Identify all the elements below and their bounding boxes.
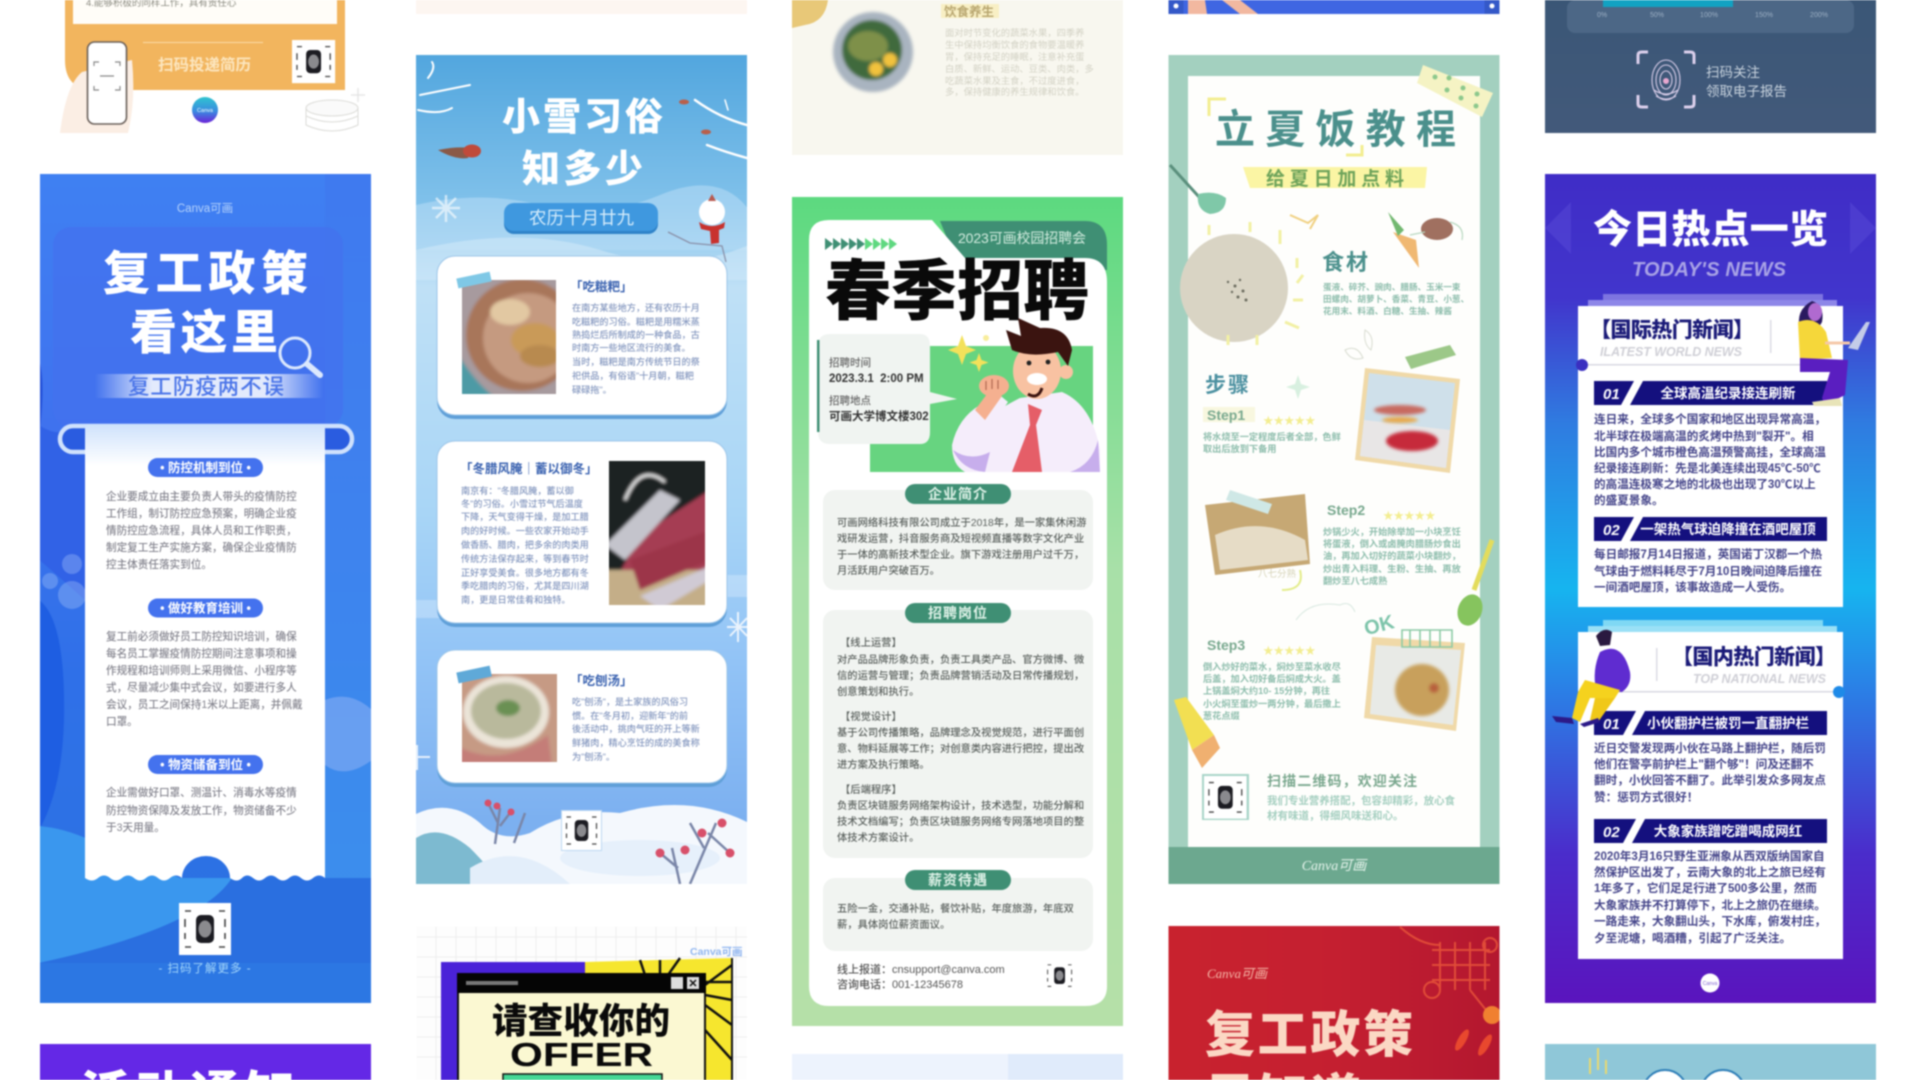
section: 薪资待遇	[823, 870, 1093, 951]
section: 招聘岗位	[823, 603, 1093, 858]
card: 吃糍粑: 祀供品，有俗语"十月朝，糍粑	[572, 370, 694, 381]
section: 防控机制到位	[106, 458, 297, 571]
title: 今日热点一览: 今日热点一览	[1593, 208, 1828, 252]
card: 吃刨汤: 「吃刨汤」	[570, 673, 633, 688]
section: 做好教育培训	[106, 598, 303, 728]
panel: cream food card (cropped top): 白质、新鲜、运动、豆类、肉类，多	[945, 63, 1094, 74]
title: 春季招聘: 春季招聘	[825, 254, 1089, 328]
news bar 02	[1594, 819, 1827, 843]
step 2: 将蛋液，倒入或卤腌肉腊肠炒食出	[1323, 538, 1461, 549]
step 2: 油，再加入切好的蔬菜小块翻炒，	[1323, 550, 1461, 561]
step 1: 取出后放到下备用	[1203, 443, 1276, 454]
window: OFFER	[510, 1036, 653, 1073]
contact info: 咨询电话：001-12345678	[837, 977, 963, 991]
panel: blue return-to-work policy poster	[39, 174, 372, 1003]
card: 冬腊风腌: 季吃腊肉的习俗，尤其是四川湖	[461, 580, 589, 591]
panel: 春季招聘 poster	[792, 197, 1123, 1026]
text: scan prompt: 扫码关注	[1706, 65, 1760, 80]
step 3: ★★★★★	[1263, 645, 1316, 657]
news bar 01	[1594, 711, 1827, 735]
date pill: 农历十月廿九	[529, 208, 634, 228]
subtitle band: 复工防疫两不误	[128, 375, 284, 399]
icon: sparkles	[948, 335, 989, 372]
section: 招聘岗位: 招聘岗位	[928, 605, 988, 621]
icon: fingerprint scan	[1638, 52, 1694, 107]
card: 吃糍粑: 当时，糍粑是南方传统节日的祭	[572, 356, 700, 367]
illustration: man	[952, 318, 1100, 472]
card: 吃刨汤: 惯。在"冬月初，迎新年"的前	[572, 710, 688, 721]
panel: national news: 夕至泥塘，喝酒糟，引起了广泛关注。	[1594, 931, 1791, 945]
chart: progress bar fragment: 0%	[1597, 12, 1607, 19]
section: 招聘岗位: 创意策划和执行。	[837, 685, 919, 698]
text: scan caption: - 扫码了解更多 -	[158, 961, 252, 975]
section: 物资储备到位: 防控物资保障及发放工作，物资储备不少	[106, 804, 297, 817]
panel: national news	[1578, 620, 1845, 959]
icon: magnifier	[280, 338, 320, 375]
panel: national news: 然保护区出发了，云南大象的北上之旅已经有	[1594, 865, 1826, 879]
step 3: Step3	[1207, 637, 1245, 653]
icon: snowman	[668, 194, 726, 262]
panel: world news: 【国际热门新闻】	[1590, 318, 1754, 342]
section: 招聘岗位: 对产品品牌形象负责，负责工具类产品、官方微博、微	[837, 653, 1085, 666]
photo: salad plate	[1345, 330, 1460, 473]
paper scroll	[85, 425, 325, 880]
news bar 01: 01	[1603, 386, 1620, 403]
contact info	[837, 962, 1005, 991]
section: 物资储备到位: • 物资储备到位 •	[160, 757, 251, 772]
panel: national news: 【国内热门新闻】	[1672, 645, 1836, 669]
follow text: 扫描二维码，欢迎关注	[1267, 773, 1417, 789]
panel: OFFER poster (cropped)	[416, 926, 749, 1080]
text: Canva logo: Canva可画	[1207, 966, 1269, 981]
section: 防控机制到位: 制定复工生产实施方案，确保企业疫情防	[106, 541, 297, 554]
step 3: 倒入炒好的菜水，焖炒至菜水收尽	[1203, 661, 1342, 672]
info bubble	[817, 334, 957, 444]
panel: 今日热点一览 poster	[1545, 174, 1876, 1003]
card: 冬腊风腌: 做香肠、腊肉，把多余的肉类用	[461, 539, 589, 550]
panel: top-left orange recruiting card: Canva	[197, 108, 214, 114]
news bar 02: 大象家族蹭吃蹭喝成网红	[1654, 823, 1802, 839]
card: 吃糍粑: 在南方某些地方，还有农历十月	[572, 302, 700, 313]
panel: world news: 的高温连极寒之地的北极也出现了30℃以上	[1594, 477, 1816, 491]
news bar 02: 一架热气球迫降撞在酒吧屋顶	[1640, 521, 1816, 537]
step 2: 炒锅少火，开始除举加一小块烹饪	[1323, 526, 1461, 537]
title: 立夏饭教程: 立夏饭教程	[1215, 108, 1456, 152]
title: 复工政策: 复工政策	[1205, 1007, 1413, 1063]
section: 防控机制到位: 企业要成立由主要负责人带头的疫情防控	[106, 490, 297, 503]
ingredients text: 田螺肉、胡萝卜、香菜、青豆、小葱、	[1323, 293, 1469, 304]
section: 防控机制到位: 情防控应急流程，具体人员和工作职责，	[106, 524, 297, 537]
panel: cream food card (cropped top): 吃蔬菜水果及主食，不过度进食，	[945, 75, 1084, 86]
panel: cream food card (cropped top)	[792, 0, 1123, 155]
photo: rice bowl	[1180, 215, 1318, 345]
QR code	[561, 810, 602, 851]
panel: national news: 1年多了，它们足足行进了500多公里，然而	[1594, 881, 1817, 895]
card: 冬腊风腌	[437, 441, 727, 627]
panel: world news: ILATEST WORLD NEWS	[1600, 345, 1743, 359]
section: 薪资待遇: 五险一金，交通补贴，餐饮补贴，年度旅游，年底双	[837, 902, 1074, 915]
card: 冬腊风腌: 传统方法保存起来，等到春节时	[461, 553, 589, 564]
news bar 01: 01	[1603, 716, 1620, 733]
section: 做好教育培训: • 做好教育培训 •	[160, 600, 251, 616]
QR code	[1046, 963, 1074, 988]
section: 做好教育培训: 口罩。	[106, 716, 138, 728]
section: 企业简介: 可画网络科技有限公司成立于2018年，是一家集休闲游	[837, 516, 1086, 529]
info bubble: 招聘地点	[829, 394, 871, 407]
section: 做好教育培训: 每名员工掌握疫情防控期间注意事项和操	[106, 647, 297, 660]
footer: Canva可画	[1302, 859, 1368, 874]
panel: purple poster bottom-left (cropped)	[40, 1044, 371, 1080]
panel: national news: 近日交警发现两小伙在马路上翻护栏，随后罚	[1594, 741, 1826, 755]
panel: top-left orange recruiting card	[60, 0, 365, 133]
card: 吃糍粑: 吃糍粑的习俗。糍粑是用糯米蒸	[572, 316, 700, 327]
section: 防控机制到位: 控主体责任落实到位。	[106, 558, 212, 571]
step 2	[1323, 502, 1462, 586]
icon: Chinese knot	[1400, 927, 1497, 1015]
panel: cream food card (cropped top): 生中保持均衡饮食的食物要温暖养	[945, 39, 1084, 50]
title: 小雪习俗知多少	[502, 97, 663, 191]
step 2: 翻炒至八七成熟	[1323, 575, 1387, 586]
section: 招聘岗位: 体技术方案设计。	[837, 831, 919, 844]
panel: cream food card (cropped top): 胃，保持充足的睡眠，注意补充蛋	[945, 51, 1084, 62]
news bar 01	[1594, 381, 1827, 405]
panel: 小雪习俗 poster	[416, 55, 750, 884]
panel: 立夏饭教程 poster	[1168, 55, 1500, 884]
contact info: 线上报道：cnsupport@canva.com	[837, 962, 1005, 976]
section: 招聘岗位: 【视觉设计】	[840, 710, 902, 723]
subtitle band	[95, 374, 323, 399]
ingredients text: 花用末、料酒、白糖、生抽、辣酱	[1323, 305, 1452, 316]
panel: cream food card (cropped top): 面对时节变化的蔬菜水果，四季养	[945, 27, 1084, 38]
panel: national news: 一路走来，大象翻山头，下水库，俯发村庄，	[1594, 914, 1826, 928]
section: 招聘岗位: 意、物料延展等工作；对创意类内容进行把控，提出改	[837, 742, 1085, 755]
card: 冬腊风腌: 正好享受美食。很多地方都有冬	[461, 567, 589, 578]
step 3	[1203, 637, 1342, 721]
snow ground	[416, 612, 749, 884]
panel: national news: 大象家族并不打算停下，北上之旅仍在继续。	[1594, 898, 1826, 912]
title: 小雪习俗知多少: 小雪习俗	[502, 97, 663, 139]
step 1: 将水烧至一定程度后者全部，色鲜	[1203, 431, 1341, 442]
card: 冬腊风腌: 肉的好时候。一些农家开始动手	[461, 525, 589, 536]
date pill	[504, 203, 658, 234]
title: 复工政策看这里: 看这里	[130, 306, 278, 359]
section: 招聘岗位: 【后端程序】	[840, 783, 902, 796]
panel: world news: 连日来，全球多个国家和地区出现异常高温，	[1594, 412, 1826, 426]
panel: world news	[1576, 294, 1843, 607]
icon: sauce bottle	[1174, 697, 1220, 768]
section: 企业简介	[823, 484, 1093, 590]
step 1: ★★★★★	[1263, 415, 1316, 427]
title: 复工政策看这里	[103, 247, 308, 359]
chart: progress bar fragment	[1567, 0, 1854, 33]
section: 企业简介: 企业简介	[928, 486, 988, 502]
section: 做好教育培训: 作规程和培训师则上采用微信、小程序等	[106, 664, 297, 677]
card: 冬腊风腌: 下降，天气变得干燥，是加工腊	[461, 511, 589, 522]
panel: world news: 每日邮报7月14日报道，英国诺丁汉郡一个热	[1594, 547, 1822, 561]
chart: progress bar fragment: 100%	[1700, 12, 1718, 19]
card: 吃糍粑: 「吃糍粑」	[570, 279, 633, 294]
section: 招聘岗位: 负责区块链服务网络架构设计，技术选型，功能分解和	[837, 799, 1084, 812]
card: 冬腊风腌: 南京有："冬腊风腌，蓄以御	[461, 485, 574, 496]
card: 吃刨汤: 鲜猪肉，精心烹饪的成的美食称	[572, 737, 700, 748]
panel: world news: 的盛夏景象。	[1594, 493, 1664, 507]
tab: 校园招聘会	[940, 221, 1107, 270]
illustration: sitting man	[1552, 630, 1630, 727]
icon: bird	[438, 144, 481, 158]
card: 吃刨汤: 後活动中，挑肉气旺的开上等新	[572, 723, 700, 734]
tab: 校园招聘会: 2023可画校园招聘会	[958, 230, 1086, 246]
panel: world news: 纪录接连刷新：先是北美连续出现45℃-50℃	[1594, 461, 1821, 475]
text: scan prompt	[1706, 65, 1787, 99]
icon: arrows	[825, 238, 897, 250]
green hero block	[870, 346, 1093, 472]
step 3: 后盖，加入切好备后焖成大火。盖	[1203, 673, 1341, 684]
subtitle band	[1243, 167, 1427, 190]
panel: world news: 气球由于燃料耗尽于7月10日晚间迫降后撞在	[1594, 564, 1822, 578]
panel: national news: 翻时，小伙回答不翻了。此举引发众多网友点	[1594, 773, 1826, 787]
panel: national news: 他们在警亭前护栏上"翻个够"！问及还翻不	[1594, 757, 1814, 771]
window: 请查收你的	[492, 1001, 670, 1041]
step 3: 上锅盖焖大约10- 15分钟，再往	[1203, 685, 1330, 696]
logo: footer dot: Canva	[1703, 981, 1717, 987]
card: 吃刨汤: 为"刨汤"。	[572, 751, 615, 762]
ingredients text	[1323, 281, 1469, 316]
heading: 食材: 食材	[1322, 250, 1368, 275]
photo: fried rice: OK	[1362, 611, 1397, 640]
section: 薪资待遇: 薪资待遇	[928, 872, 988, 888]
step 3: 小火焖至蛋炒一两分钟，最后撒上	[1203, 698, 1341, 709]
text: Canva logo: Canva可画	[690, 946, 743, 958]
panel: teal card bottom of column five	[1545, 1044, 1876, 1080]
section: 物资储备到位	[106, 755, 297, 834]
section: 招聘岗位: 技术文档编写；负责区块链服务网络专网落地项目的整	[837, 815, 1084, 828]
info bubble: 2023.3.1 2:00 PM	[829, 373, 924, 385]
section: 企业简介: 月活跃用户突破百万。	[837, 564, 940, 577]
title: 小雪习俗知多少: 知多少	[522, 149, 643, 191]
section: 防控机制到位: • 防控机制到位 •	[160, 460, 251, 475]
follow text	[1267, 773, 1456, 822]
card: 吃糍粑: 熟捣烂后所制成的一种食品，古	[572, 329, 700, 340]
section: 做好教育培训: 式，尽量减少集中式会议，如要进行多人	[106, 681, 297, 694]
step 1: Step1	[1207, 407, 1245, 423]
text: Canva logo: Canva可画	[177, 203, 233, 215]
icon: ladle	[1170, 165, 1226, 214]
panel: cream food card (cropped top): 饮食养生	[944, 4, 994, 19]
news bar 01: 全球高温纪录接连刷新	[1660, 385, 1796, 401]
info bubble: 招聘时间	[829, 356, 871, 369]
card: 冬腊风腌: 冬"的习俗。小雪过节气后温度	[461, 498, 583, 509]
panel: slate report card (cropped top)	[1545, 0, 1876, 133]
news bar 02: 02	[1603, 522, 1620, 539]
step 2: Step2	[1327, 502, 1365, 518]
panel: national news: 2020年3月16只野生亚洲象从西双版纳国家自	[1594, 849, 1825, 863]
section: 做好教育培训: 复工前必须做好员工防控知识培训，确保	[106, 630, 297, 643]
news bar 02	[1594, 517, 1827, 541]
section: 物资储备到位: 于3天用量。	[106, 822, 165, 834]
card: 吃糍粑: 碌碌拖"。	[572, 384, 612, 395]
panel: cream food card (cropped top): 多，保持健康的养生规律和饮食。	[945, 86, 1084, 97]
panel: blue card top of column four	[1168, 0, 1500, 14]
panel: pale blue card bottom of column three	[792, 1054, 1123, 1080]
heading: 步骤	[1205, 374, 1310, 399]
section: 薪资待遇: 薪，具体岗位薪资面议。	[837, 918, 950, 931]
chart: progress bar fragment: 50%	[1650, 12, 1664, 19]
photo: noodle plate	[833, 12, 913, 92]
subtitle band: 给夏日加点料	[1266, 168, 1404, 190]
step 2: ★★★★★	[1383, 510, 1436, 522]
ingredients text: 蛋液、碎芥、豌肉、腊肠、玉米一束	[1323, 281, 1461, 292]
panel: top-left orange recruiting card: 扫码投递简历	[158, 55, 251, 74]
card: 冬腊风腌: 南，更是日常佳肴和独特。	[461, 594, 570, 605]
title: 复工政策看这里: 复工政策	[103, 247, 308, 300]
news bar 02: 02	[1603, 824, 1620, 841]
section: 企业简介: 戏研发运营，抖音服务商及短视频直播等数字文化产业	[837, 532, 1084, 545]
illustration: woman with laptop	[1798, 301, 1870, 406]
heading: 步骤: 步骤	[1205, 374, 1249, 397]
photo: fried rice	[1362, 611, 1465, 731]
card: 冬腊风腌: 「冬腊风腌｜蓄以御冬」	[460, 461, 598, 476]
card: 吃刨汤	[437, 650, 727, 787]
panel: red policy poster (cropped)	[1168, 926, 1501, 1080]
panel: world news: 比国内多个城市橙色高温预警高挂，全球高温	[1594, 445, 1826, 459]
panel: pale card top of column two	[416, 0, 747, 14]
chart: progress bar fragment: 150%	[1755, 12, 1773, 19]
news bar 01: 小伙翻护栏被罚一直翻护栏	[1647, 715, 1809, 731]
section: 企业简介: 于一体的高新技术型企业。旗下游戏注册用户过千万，	[837, 548, 1084, 561]
QR code	[179, 903, 231, 955]
window	[457, 973, 706, 1080]
subtitle: TODAY'S NEWS	[1632, 259, 1787, 281]
tape: dotted	[1417, 65, 1493, 117]
card: 吃糍粑: 时南方一些地区流行的美食。	[572, 342, 691, 353]
section: 防控机制到位: 工作组，制订防控应急预案，明确企业疫	[106, 507, 297, 520]
section: 招聘岗位: 【线上运营】	[840, 636, 902, 649]
follow text: 材有味道，得细风味送和心。	[1267, 809, 1404, 822]
section: 物资储备到位: 企业需做好口罩、测温计、消毒水等疫情	[106, 786, 297, 799]
logo: footer dot	[1700, 974, 1720, 992]
step 1	[1203, 407, 1341, 454]
QR code	[1202, 774, 1249, 820]
step 3: 葱花点缀	[1203, 710, 1240, 721]
branches and birds	[418, 62, 747, 158]
footer	[1168, 847, 1500, 884]
icon: carrot and mushroom	[1388, 212, 1462, 268]
info bubble: 可画大学博文楼302	[829, 409, 929, 423]
card: 吃刨汤: 吃"刨汤"，是土家族的风俗习	[572, 696, 688, 707]
icon: snowflake	[432, 195, 460, 222]
chart: progress bar fragment: 200%	[1810, 12, 1828, 19]
step 2: 炒出青入料理、生粉、生抽、再放	[1323, 563, 1462, 574]
scroll bar	[60, 426, 352, 452]
section: 招聘岗位: 信的运营与管理；负责品牌营销活动及日常传播规划，	[837, 669, 1084, 682]
section: 做好教育培训: 会议，员工之间保持1米以上距离，并佩戴	[106, 698, 303, 711]
panel: world news: 北半球在极端高温的炙烤中热到"裂开"。相	[1594, 429, 1814, 443]
follow text: 我们专业营养搭配，包容却精彩，放心食	[1267, 794, 1456, 807]
section: 招聘岗位: 进方案及执行策略。	[837, 758, 930, 771]
photo: chopping board	[1205, 490, 1310, 590]
panel: national news: 赞：惩罚方式很好！	[1594, 790, 1698, 804]
panel: national news: TOP NATIONAL NEWS	[1693, 672, 1827, 686]
icon: whisk	[1453, 540, 1492, 629]
section: 招聘岗位: 基于公司传播策略，品牌理念及视觉规范，进行平面创	[837, 726, 1084, 739]
photo: chopping board: 八七分熟	[1258, 568, 1297, 580]
panel: world news: 一间酒吧屋顶，该事故造成一人受伤。	[1594, 580, 1791, 594]
text: scan prompt: 领取电子报告	[1706, 84, 1787, 99]
card: 吃糍粑	[437, 256, 727, 419]
